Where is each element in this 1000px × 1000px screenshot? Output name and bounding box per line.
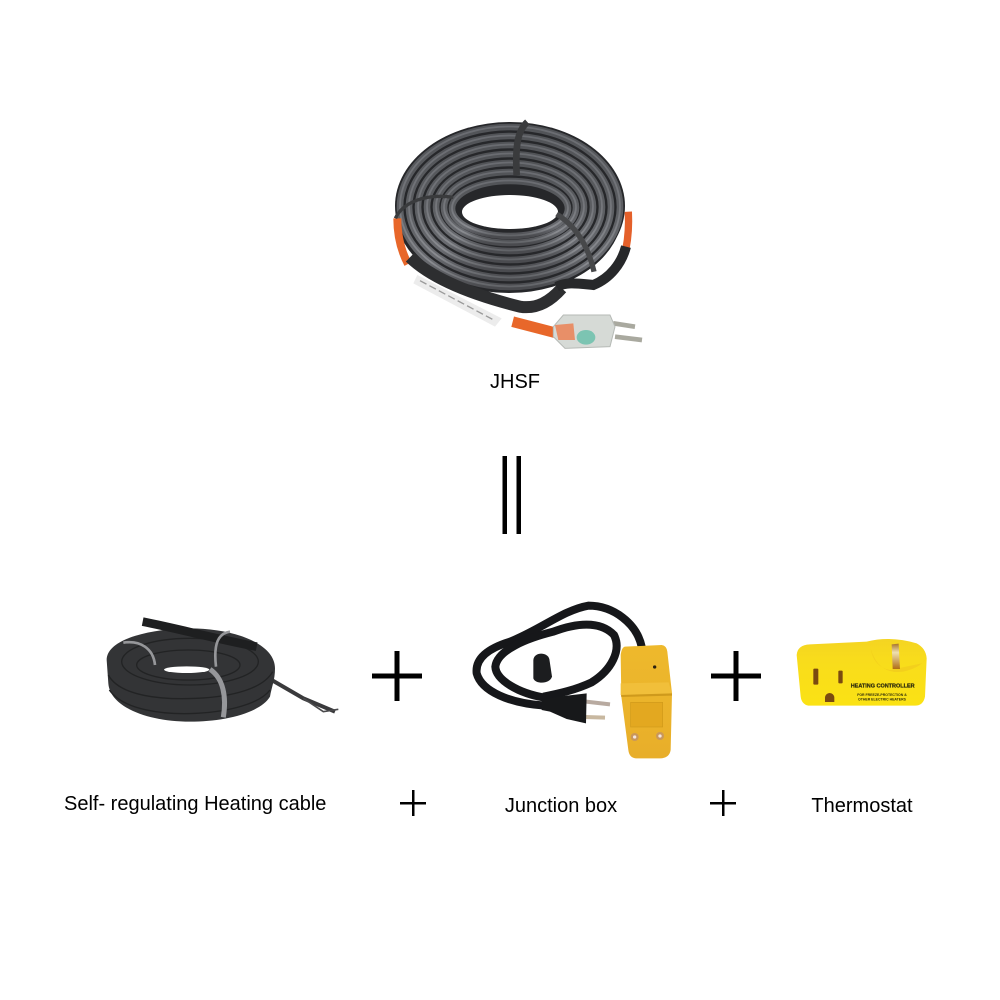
product image: thermostat bbox=[797, 639, 927, 706]
small plus 1 bbox=[400, 790, 426, 816]
power cord bbox=[477, 606, 642, 706]
coil body bbox=[107, 628, 275, 722]
label: JHSF: JHSF bbox=[490, 371, 540, 393]
product image: self-regulating heating cable bbox=[107, 622, 338, 722]
thermostat body bbox=[797, 639, 927, 706]
coil centre hole bbox=[462, 195, 558, 229]
plug bbox=[542, 693, 610, 723]
indicator dot bbox=[653, 665, 656, 669]
device label: HEATING CONTROLLER bbox=[851, 684, 915, 690]
cable end stick bbox=[143, 622, 257, 647]
coil hole bbox=[164, 666, 209, 673]
product image: JHSF heating cable coil bbox=[395, 122, 642, 348]
device label: OTHER ELECTRIC HEATERS bbox=[858, 697, 907, 701]
caption: thermostat: Thermostat bbox=[811, 795, 913, 817]
large plus 1 bbox=[372, 651, 422, 701]
label strip bbox=[413, 275, 502, 327]
yellow box bbox=[621, 645, 672, 758]
device label bbox=[851, 684, 915, 701]
cable junction sleeve bbox=[557, 247, 626, 287]
dial bbox=[892, 644, 900, 669]
rubber end cap bbox=[533, 654, 552, 683]
caption: junction box: Junction box bbox=[505, 795, 617, 817]
orange power lead bbox=[513, 322, 555, 333]
clear plug bbox=[553, 315, 642, 348]
right cable tie bbox=[557, 214, 594, 272]
top cable tie bbox=[516, 122, 527, 175]
equals sign rotated vertical bbox=[502, 456, 521, 534]
device label: FOR FREEZE-PROTECTION & bbox=[857, 693, 907, 697]
box panel bbox=[631, 702, 663, 727]
product image: junction box bbox=[477, 606, 672, 758]
caption: self-regulating heating cable: Self- regulating Heating cable bbox=[64, 793, 326, 815]
large plus 2 bbox=[711, 651, 761, 701]
small plus 2 bbox=[710, 790, 736, 816]
left cable tie bbox=[395, 196, 453, 218]
lower cable bbox=[410, 257, 562, 307]
orange heating lead left bbox=[397, 218, 408, 264]
dial housing shade bbox=[871, 648, 926, 672]
outlet slots bbox=[813, 669, 818, 685]
grey ties bbox=[123, 632, 230, 717]
orange heating lead right bbox=[626, 212, 629, 248]
screws bbox=[631, 733, 639, 741]
lead wire bbox=[272, 680, 335, 712]
